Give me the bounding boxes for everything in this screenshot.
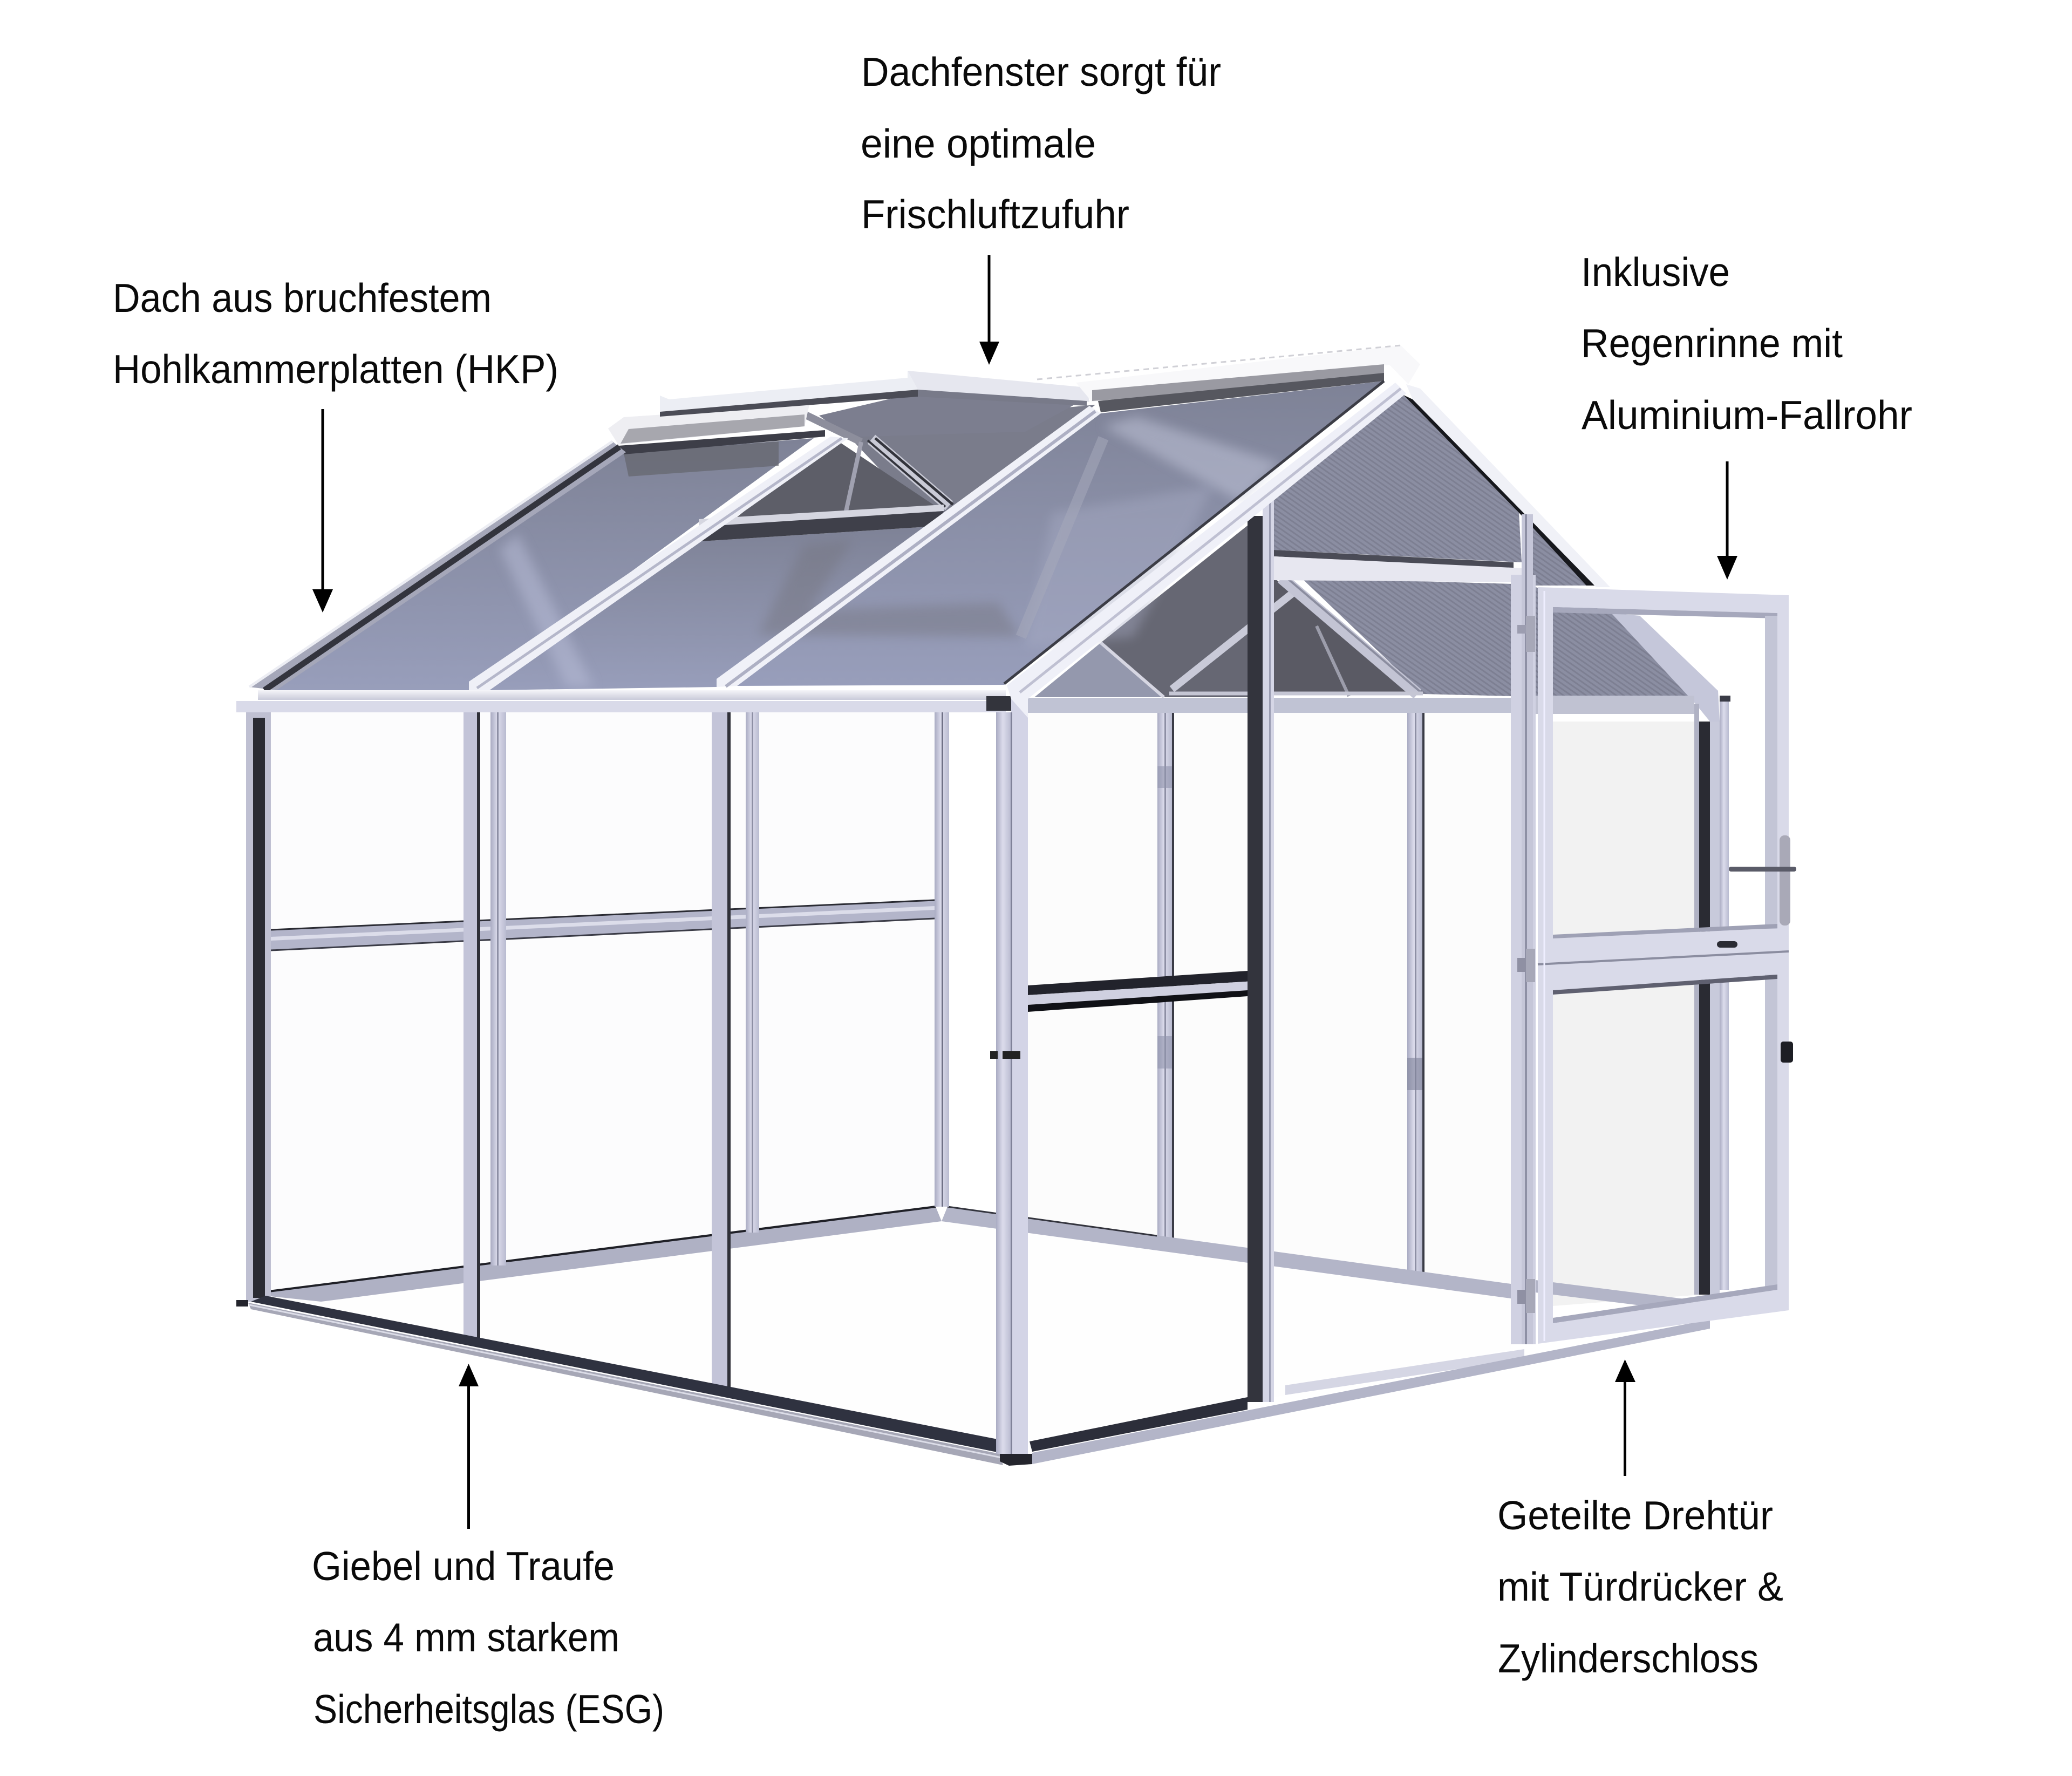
- transom: [1274, 550, 1524, 582]
- callout: safety glass: [312, 1543, 664, 1732]
- roof vent rail: [699, 505, 944, 541]
- front base rail: [236, 1296, 1003, 1465]
- door handle: [1729, 835, 1796, 926]
- arrow: roof panels: [312, 409, 333, 613]
- callout: split door: Geteilte Drehtür: [1497, 1493, 1773, 1538]
- greenhouse illustration: [236, 345, 1796, 1466]
- callout: split door: mit Türdrücker &: [1497, 1564, 1783, 1609]
- rear and right wall frame: [265, 395, 1730, 1311]
- callout: roof vent: eine optimale: [861, 121, 1096, 166]
- callout: roof vent: [861, 49, 1221, 237]
- cylinder lock: [1781, 1042, 1793, 1063]
- rear base rails: [265, 1207, 1689, 1311]
- callout: split door: [1497, 1493, 1783, 1681]
- corner post: [990, 699, 1028, 1454]
- left wall frame: [236, 696, 1013, 1465]
- front-wall posts: [464, 712, 731, 1394]
- rear right gable and posts behind door: [1536, 613, 1730, 1295]
- callout: roof panels: Hohlkammerplatten (HKP): [113, 346, 558, 392]
- door frame: [1538, 587, 1789, 1344]
- door latch: [1717, 941, 1737, 948]
- callout: safety glass: aus 4 mm starkem: [313, 1615, 619, 1660]
- glass walls and floor: [269, 712, 1694, 1452]
- callout: rain gutter: [1581, 249, 1912, 438]
- left roof cap: [608, 405, 825, 454]
- arrow: rain gutter: [1717, 461, 1737, 580]
- gable struts: [1101, 578, 1423, 697]
- swing door: [1511, 514, 1796, 1344]
- hinges: [1517, 616, 1535, 1313]
- eave beam: [236, 701, 1006, 712]
- callout: roof panels: [113, 275, 558, 392]
- left corner post: [246, 712, 271, 1302]
- roof rafters: [469, 406, 1101, 690]
- inner posts: [490, 712, 949, 1265]
- raised roof vent sash: [660, 371, 1089, 417]
- rear posts: [1157, 713, 1424, 1272]
- front rail: [1028, 971, 1263, 1012]
- callout: safety glass: Sicherheitsglas (ESG): [313, 1686, 664, 1732]
- ridge cap: [1037, 345, 1420, 412]
- callout: roof panels: Dach aus bruchfestem: [113, 275, 492, 321]
- callout: roof vent: Dachfenster sorgt für: [861, 49, 1221, 94]
- callout: rain gutter: Inklusive: [1581, 249, 1730, 295]
- gable panes: [1034, 395, 1695, 697]
- callout: roof vent: Frischluftzufuhr: [861, 192, 1129, 237]
- door inner beads: [1538, 591, 1789, 1341]
- callout: rain gutter: Aluminium-Fallrohr: [1582, 392, 1912, 438]
- arrow: roof vent: [979, 255, 999, 365]
- gutter: [258, 690, 1006, 700]
- callout: split door: Zylinderschloss: [1498, 1636, 1759, 1681]
- callout: safety glass: Giebel und Traufe: [312, 1543, 615, 1589]
- roof vent opening: [732, 392, 1095, 532]
- gable rafters: [1004, 381, 1610, 718]
- door jamb: [1511, 514, 1536, 1344]
- arrow: split door: [1615, 1359, 1635, 1476]
- front gable wall: [990, 381, 1710, 1466]
- mid rail: [271, 900, 935, 950]
- door-side jamb: [1248, 500, 1274, 1402]
- front right base: [1000, 1319, 1710, 1466]
- roof: [249, 345, 1420, 700]
- rear eave bar: [1028, 698, 1693, 713]
- eave strap: [986, 696, 1013, 711]
- roof left edge: [249, 441, 626, 690]
- roof panes: [275, 381, 1384, 690]
- callout: rain gutter: Regenrinne mit: [1581, 321, 1843, 366]
- arrow: safety glass: [459, 1364, 479, 1529]
